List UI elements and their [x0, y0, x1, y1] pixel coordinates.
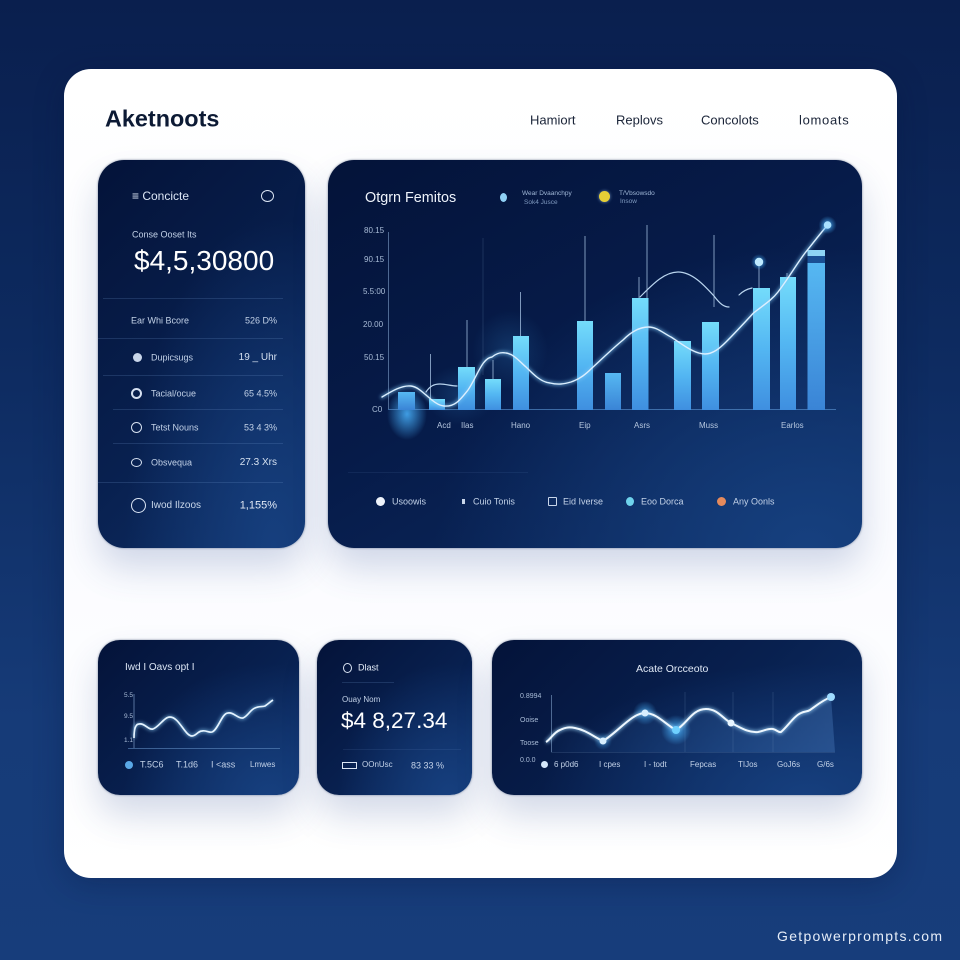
legend: yellow icon with caption [597, 189, 655, 205]
panel: small line chart [98, 640, 299, 795]
legend dot [125, 761, 133, 769]
x axis labels: Hano [511, 421, 531, 430]
legend label: Eoo Dorca [641, 496, 684, 506]
panel: wide line chart [492, 640, 862, 795]
legend item: cyan dot [626, 497, 634, 506]
white dashboard panel [64, 69, 897, 878]
row value: 1,155% [240, 500, 277, 512]
row label: Ear Whi Bcore [131, 316, 189, 326]
icon: yellow badge [599, 191, 610, 202]
chart legend [376, 496, 775, 506]
nav item: Concolots: Concolots [701, 112, 759, 128]
row icon [131, 422, 142, 433]
x axis labels: Ilas [461, 421, 473, 430]
panel heading: Dlast [358, 662, 379, 672]
legend label: T.5C6 [140, 760, 164, 770]
small chart: 9.5 [124, 713, 133, 720]
glow spots [387, 310, 548, 440]
legend label: Any Oonls [733, 496, 775, 506]
x axis labels [437, 421, 804, 430]
row: Obsvequa [131, 457, 277, 468]
wide chart: 0.0.0 [520, 757, 536, 764]
row value: 526 D% [245, 316, 277, 326]
balance label: Conse Ooset Its [132, 230, 197, 240]
row: totals header [131, 316, 277, 326]
caption line 2: Insow [620, 198, 637, 205]
legend label: Eid Iverse [563, 496, 603, 506]
panel: small value card [317, 640, 472, 795]
row icon [131, 498, 146, 513]
caption: T/Vbsowsdo [619, 190, 655, 197]
y axis and labels: 80.15 [364, 226, 385, 235]
value: $4 8,27.34 [341, 708, 447, 733]
row: Tetst Nouns [131, 422, 277, 433]
row value: 19 _ Uhr [239, 352, 277, 363]
caption: Wear Dvaanchpy [522, 190, 572, 197]
legend label: Usoowis [392, 496, 426, 506]
footer value: 83 33 % [411, 760, 444, 770]
x axis labels: Eip [579, 421, 591, 430]
row icon [131, 458, 142, 467]
row label: Dupicsugs [151, 352, 193, 362]
nav item: Replovs: Replovs [616, 112, 663, 128]
title: Aketnoots [105, 105, 219, 131]
legend label: I <ass [211, 760, 235, 770]
x axis labels: Muss [699, 421, 718, 430]
x label: I cpes [599, 760, 620, 769]
panel: main chart [328, 160, 862, 548]
wide chart: Toose [520, 740, 539, 747]
data point markers [751, 216, 837, 270]
row label: Iwod Ilzoos [151, 500, 201, 511]
wide chart: Ooise [520, 717, 538, 724]
icon: ring [343, 663, 352, 673]
row: Dupicsugs [133, 352, 277, 363]
x label: Fepcas [690, 760, 716, 769]
small chart legend [125, 760, 276, 770]
watermark: Getpowerprompts.com [777, 928, 943, 944]
row: Tacial [131, 388, 277, 399]
panel heading: Acate Orcceoto [636, 663, 708, 675]
y axis and labels: 20.00 [363, 320, 384, 329]
x axis labels: Earlos [781, 421, 804, 430]
x label: GoJ6s [777, 760, 800, 769]
row value: 27.3 Xrs [240, 457, 277, 468]
wide chart [520, 692, 835, 764]
icon: globe [261, 190, 274, 202]
top navigation [530, 112, 849, 128]
footer label: OOnUsc [362, 760, 393, 769]
y axis and labels: 5.5:00 [363, 287, 386, 296]
legend item: white dot [376, 497, 385, 506]
icon: drop [500, 193, 507, 202]
panel heading: Iwd I Oavs opt I [125, 662, 194, 673]
panel: summary list [98, 160, 305, 548]
row label: Tetst Nouns [151, 422, 199, 432]
small chart: 1.1 [124, 737, 133, 744]
small chart: 5.5 [124, 692, 133, 699]
small chart [124, 692, 280, 749]
legend dot [541, 761, 548, 768]
row label: Obsvequa [151, 458, 192, 468]
legend item: small marker [462, 499, 465, 504]
main trend line [382, 225, 828, 406]
x label: I - todt [644, 760, 667, 769]
row value: 53 4 3% [244, 422, 277, 432]
y axis and labels [363, 226, 836, 414]
icon: small rectangle [342, 762, 357, 769]
y axis and labels: 90.15 [364, 255, 385, 264]
caption line 2: Sok4 Jusce [524, 199, 558, 206]
x label: G/6s [817, 760, 834, 769]
x axis labels: Acd [437, 421, 451, 430]
chart heading: Otgrn Femitos [365, 190, 456, 206]
x label: 6 p0d6 [554, 760, 578, 769]
wide chart x labels [541, 760, 834, 769]
legend item: square [548, 497, 557, 506]
legend label: T.1d6 [176, 760, 198, 770]
x label: TIJos [738, 760, 758, 769]
legend: drop icon with caption [500, 190, 572, 206]
legend label: Cuio Tonis [473, 496, 515, 506]
x axis labels: Asrs [634, 421, 650, 430]
nav item: lomoats: lomoats [799, 112, 849, 128]
wide chart: 0.8994 [520, 693, 542, 700]
row icon [131, 388, 142, 399]
y axis and labels: 50.15 [364, 353, 385, 362]
y axis and labels: C0 [372, 405, 383, 414]
row: Iwod Ilzoos [131, 498, 277, 513]
row icon [133, 353, 142, 362]
legend label: Lmwes [250, 760, 275, 769]
bars [398, 250, 825, 410]
whisker lines [430, 225, 787, 400]
row value: 65 4.5% [244, 388, 277, 398]
value label: Ouay Nom [342, 695, 380, 704]
legend item: orange dot [717, 497, 726, 506]
balance value: $4,5,30800 [134, 245, 274, 276]
panel heading: ≡ Concicte [132, 189, 189, 203]
nav item: Hamiort: Hamiort [530, 112, 576, 128]
row label: Tacial/ocue [151, 388, 196, 398]
